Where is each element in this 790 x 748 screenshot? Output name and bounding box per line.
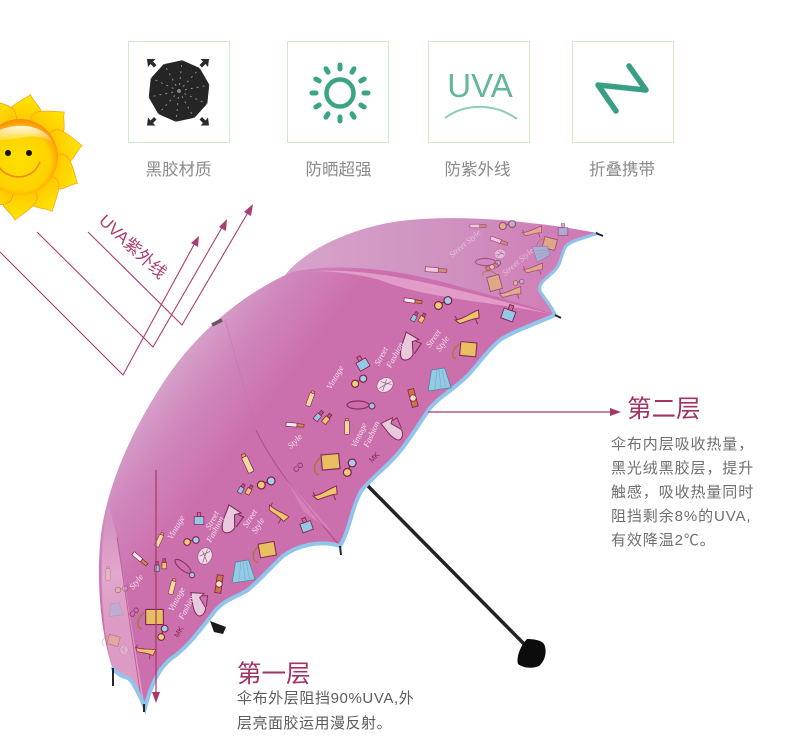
- umbrella: [99, 218, 603, 712]
- text: second layer description: 阻挡剩余8%的UVA,: [611, 507, 751, 525]
- arrow: second layer: [428, 408, 621, 416]
- canopy prints: CO: [127, 605, 141, 619]
- heading: first layer: 第一层: [237, 660, 310, 688]
- canopy prints: Fashion: [360, 419, 382, 450]
- canopy prints: Vintage: [324, 363, 346, 391]
- canopy prints: Fashion: [203, 515, 226, 545]
- back canopy panel: [285, 218, 598, 315]
- canopy prints: Vintage: [166, 585, 187, 613]
- canopy prints: CO: [291, 460, 305, 474]
- text: second layer description: 有效降温2℃。: [611, 532, 716, 549]
- canopy prints: Style: [127, 572, 145, 591]
- canopy prints: Vintage: [165, 513, 187, 541]
- text: second layer description: 触感，吸收热量同时: [611, 484, 754, 501]
- icon box: black coating: [128, 42, 230, 142]
- canopy prints: Style: [433, 334, 451, 353]
- text: second layer description: 伞布内层吸收热量，: [611, 436, 754, 453]
- blue scalloped hem: [112, 315, 555, 708]
- canopy prints: Fashion: [383, 340, 406, 370]
- umbrella rib tips: [113, 233, 603, 712]
- icon label: folding: 折叠携带: [589, 160, 655, 179]
- UVA reflected rays: [0, 204, 253, 375]
- heading: second layer: 第二层: [627, 395, 700, 423]
- canopy prints: Street: [372, 344, 390, 367]
- icon label: sun protection: 防晒超强: [306, 160, 372, 179]
- canopy prints: [127, 296, 518, 660]
- arrow: first layer: [152, 470, 160, 703]
- icon label: UVA: 防紫外线: [444, 160, 510, 179]
- canopy prints: MK: [367, 450, 381, 464]
- umbrella shaft and handle: [210, 485, 546, 668]
- back canopy panel: Street Style: [500, 245, 536, 278]
- text: first layer description: 层亮面胶运用漫反射。: [237, 715, 392, 732]
- text: second layer description: [611, 436, 754, 549]
- canopy prints: Street: [203, 508, 221, 531]
- faded prints on left panel: [102, 567, 128, 655]
- UVA rays label: UVA紫外线: [95, 211, 170, 283]
- icon box: sun protection: [288, 42, 388, 142]
- icon box: UVA: UVA: [447, 67, 513, 104]
- canopy prints: MK: [172, 625, 185, 639]
- text: first layer description: 伞布外层阻挡90%UVA,外: [237, 690, 414, 707]
- front canopy panel: [99, 268, 555, 708]
- icon box: UVA: [428, 42, 530, 142]
- text: first layer description: [237, 690, 414, 732]
- canopy prints: Street: [423, 327, 443, 349]
- icon box: folding: [572, 42, 674, 142]
- canopy prints: Fashion: [175, 592, 198, 622]
- canopy prints: Style: [285, 432, 304, 450]
- sun illustration: [0, 93, 86, 220]
- icon label: black coating: 黑胶材质: [146, 160, 212, 179]
- back canopy panel: Street Style: [447, 227, 483, 260]
- canopy prints: Vintage: [349, 421, 369, 449]
- canopy prints: Street: [240, 507, 259, 529]
- canopy prints: Style: [249, 516, 267, 535]
- text: second layer description: 黑光绒黑胶层，提升: [611, 460, 754, 477]
